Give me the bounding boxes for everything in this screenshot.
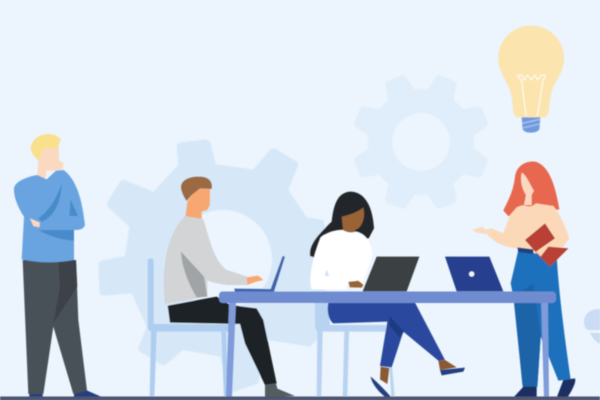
trousers [511,250,571,387]
table [219,292,556,397]
hair [31,134,61,161]
figure: standing man with hand on chin [14,134,103,397]
figure: seated woman with laptop [310,192,465,398]
hand [30,218,40,227]
icon: light bulb [498,26,564,133]
face [185,188,210,219]
sweater shadows [38,183,78,241]
chair: left [148,258,230,397]
hair [310,192,374,257]
figure: standing woman with book [445,162,575,399]
icon: large background gear [98,139,330,393]
neck and face [37,147,63,179]
hand [247,276,263,285]
trousers [23,260,87,394]
figure: seated man with laptop [164,177,295,397]
shoe [265,383,295,397]
legs [328,303,445,367]
blue laptop [445,257,503,291]
sweater [164,216,247,304]
shoes [513,378,575,399]
face [521,173,534,205]
sweater crease [325,269,329,276]
sweater and arm [485,203,569,255]
book [525,223,568,267]
belt [517,247,533,254]
icon: gear fragment at right edge [584,309,600,344]
sleeve over book [536,238,569,257]
feet [380,360,457,384]
leg shadow [389,316,404,337]
trouser shadow [53,260,77,323]
table top [219,292,556,303]
sweater [310,230,373,289]
hair [181,177,212,201]
floor line [0,396,600,400]
hair [503,162,559,216]
hand [473,227,486,234]
trousers [168,297,277,385]
laptop [234,256,285,292]
hand [348,281,363,288]
chair [315,303,395,397]
laptop [363,257,419,291]
sleeve shadow [181,252,207,297]
shoes [29,391,103,397]
table legs [226,303,549,397]
icon: small background gear [352,73,490,211]
face [342,207,364,234]
shoes [371,368,465,398]
sweater [14,170,85,262]
trouser shadow [514,283,541,387]
